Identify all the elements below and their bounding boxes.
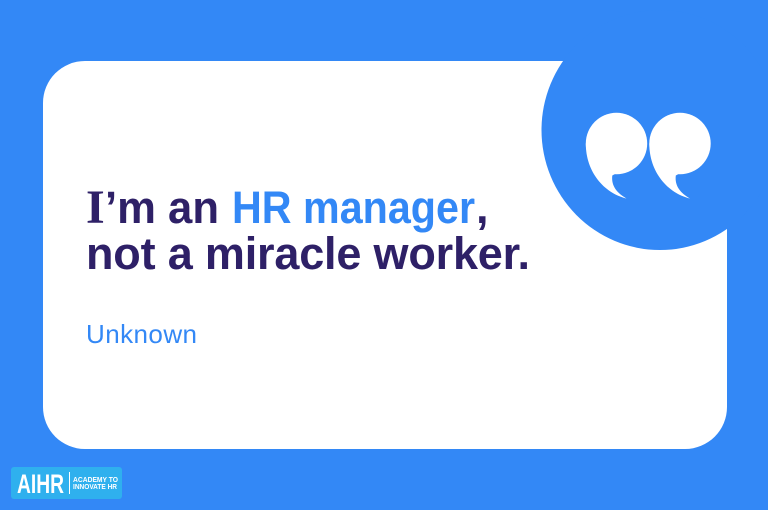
blue corner cut-out <box>542 10 768 250</box>
panel: white speech card <box>43 61 727 449</box>
logo: AIHR badge: AIHR <box>17 469 64 499</box>
icon: quotation marks <box>586 113 711 198</box>
logo: AIHR badge <box>11 467 122 499</box>
heading: quote text: not a miracle worker. <box>86 228 530 279</box>
heading: quote text: I <box>86 181 105 234</box>
heading: quote text <box>86 181 530 279</box>
logo: AIHR badge: ACADEMY TO <box>73 477 119 484</box>
heading: quote text: , <box>476 182 489 233</box>
heading: quote text: HR manager <box>232 182 475 233</box>
heading: quote text: ’m an <box>105 182 219 233</box>
attribution: Unknown <box>86 319 197 349</box>
logo: AIHR badge: INNOVATE HR <box>73 484 117 491</box>
